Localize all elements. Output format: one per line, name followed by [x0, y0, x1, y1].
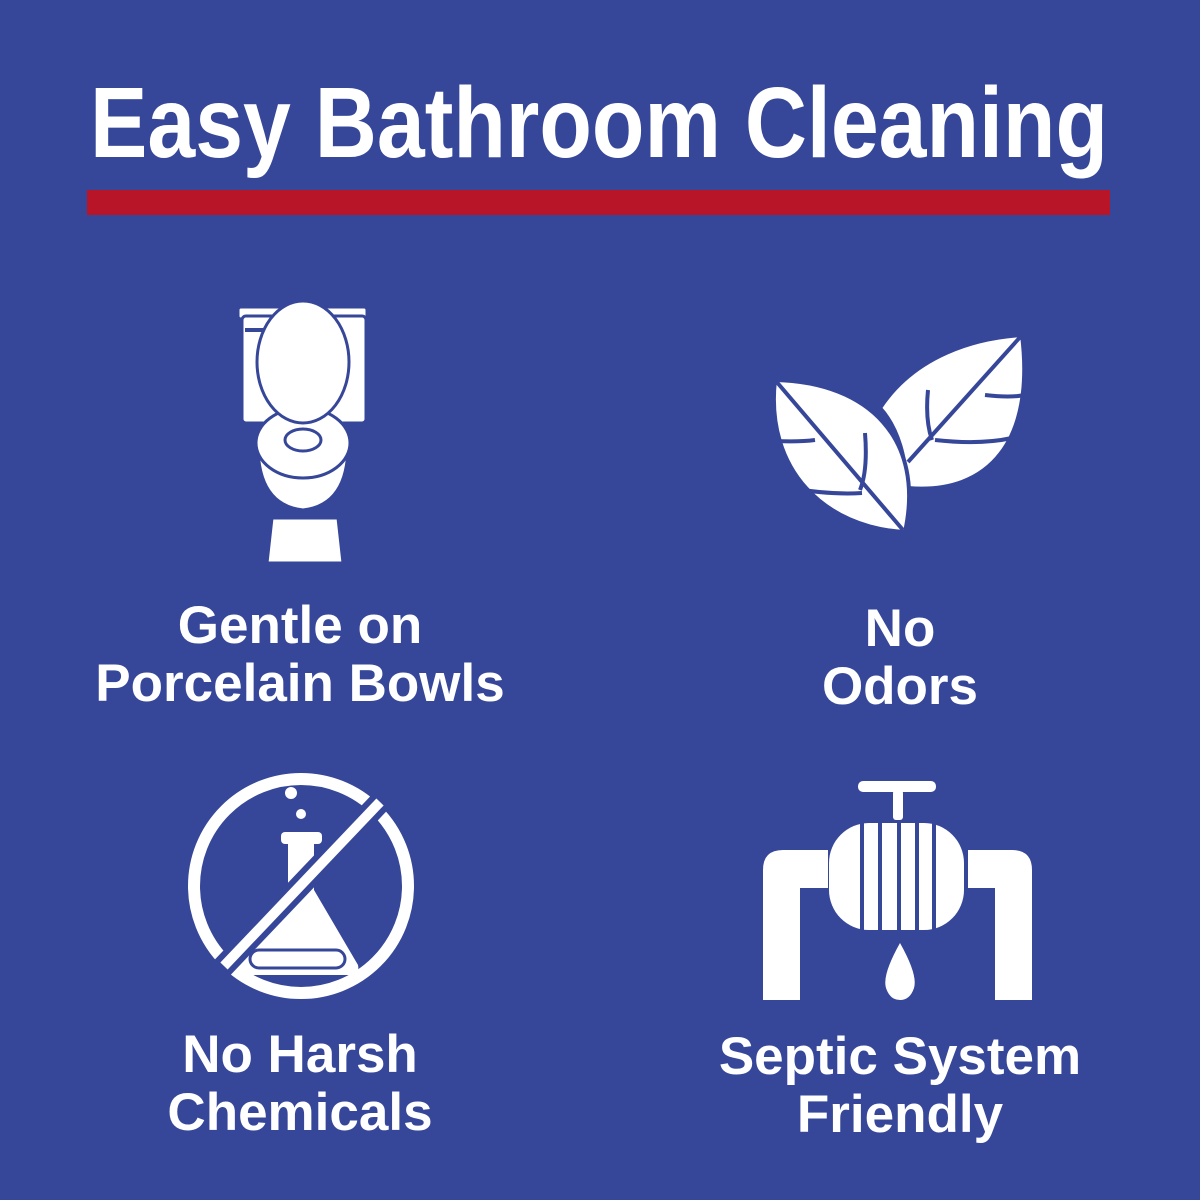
text: septic system friendly — [719, 1027, 1081, 1144]
text: no odors — [822, 599, 978, 716]
text: septic system friendly: Friendly — [797, 1085, 1003, 1144]
text: no odors: No — [865, 599, 935, 658]
text: no harsh chemicals — [167, 1025, 433, 1142]
text: gentle on porcelain: Porcelain Bowls — [95, 654, 505, 713]
text: septic system friendly: Septic System — [719, 1027, 1081, 1086]
text: gentle on porcelain: Gentle on — [178, 596, 422, 655]
red underline bar — [87, 190, 1110, 215]
text: no harsh chemicals: No Harsh — [182, 1025, 418, 1084]
text: no odors: Odors — [822, 657, 978, 716]
text: gentle on porcelain — [95, 596, 505, 713]
text: no harsh chemicals: Chemicals — [167, 1083, 433, 1142]
